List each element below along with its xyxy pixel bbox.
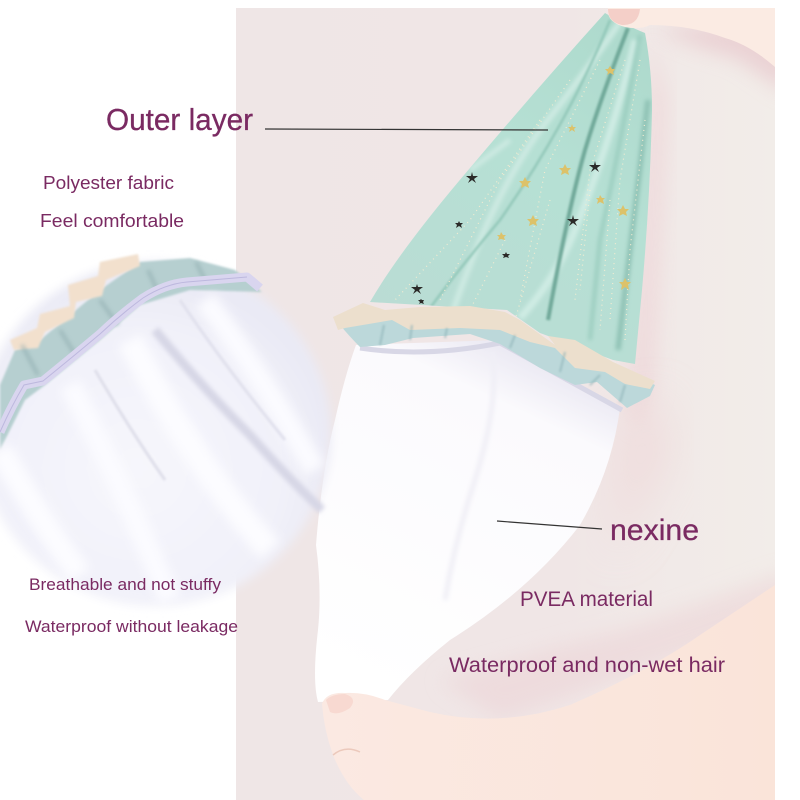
fabric folds (0, 300, 322, 600)
text block: polyester features (40, 173, 184, 231)
photo: shower cap held by hands (315, 8, 775, 800)
title: nexine: nexine (610, 514, 699, 547)
upper hand (608, 8, 775, 67)
green gathered edge (0, 254, 262, 450)
title: Outer layer: Outer layer (106, 102, 253, 137)
text block: lining features: Breathable and not stuffy (29, 575, 221, 594)
background panel (236, 8, 790, 800)
dark stars (411, 161, 601, 304)
ruffle trim (333, 303, 655, 408)
leader line: nexine (497, 521, 602, 529)
text block: polyester features: Feel comfortable (40, 211, 184, 231)
text block: nexine features (449, 588, 725, 677)
leader line: outer layer (265, 129, 548, 130)
text block: nexine features: PVEA material (520, 588, 653, 611)
gold stars (497, 66, 631, 290)
text block: polyester features: Polyester fabric (43, 173, 174, 193)
outer green fabric (370, 13, 652, 364)
lower hand (322, 585, 775, 800)
detail circle: close-up of lining (0, 254, 331, 606)
elastic band (0, 277, 260, 432)
text block: lining features: Waterproof without leakage (25, 617, 238, 636)
text block: lining features (25, 575, 238, 636)
glitter dots (395, 60, 645, 340)
inner white lining (315, 340, 622, 702)
text block: nexine features: Waterproof and non-wet hair (449, 654, 725, 677)
